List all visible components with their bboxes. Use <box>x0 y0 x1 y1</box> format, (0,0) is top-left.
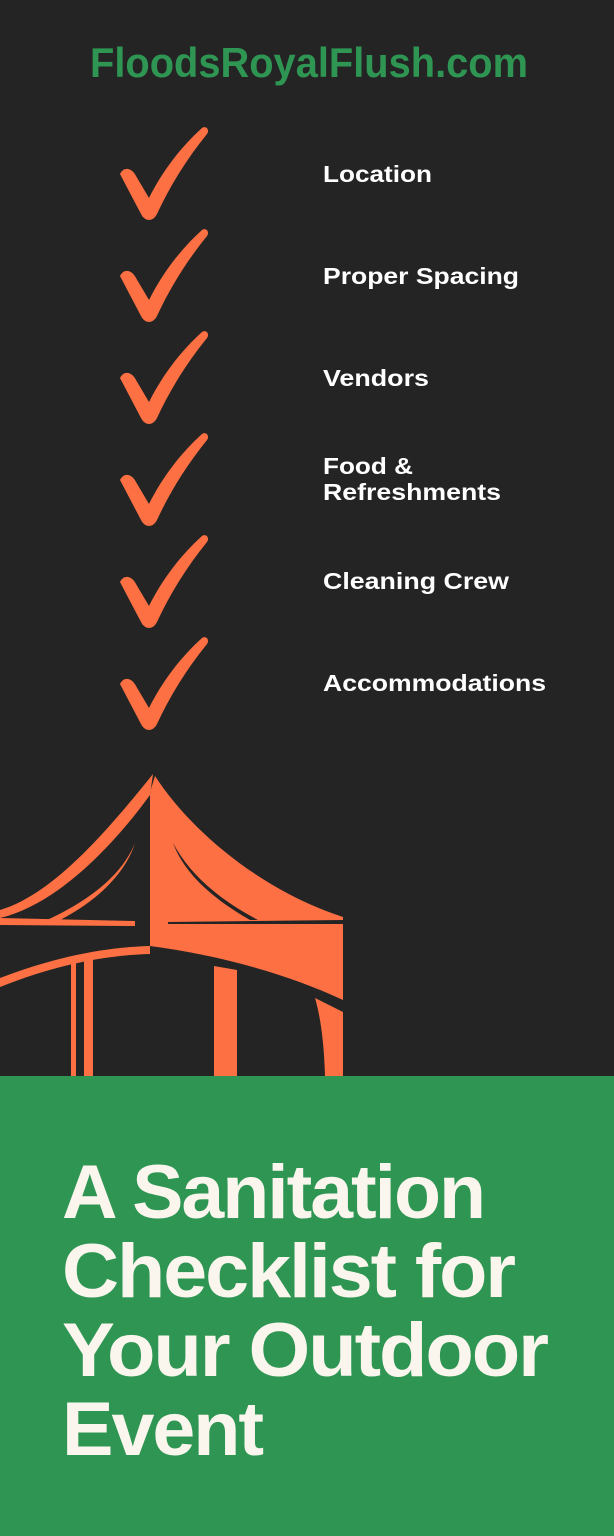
label: Vendors: Vendors <box>323 365 429 391</box>
label: Food & Refreshments: Refreshments <box>323 479 501 505</box>
icon: checkmark 2 <box>120 229 208 322</box>
header: website: FloodsRoyalFlush.com <box>90 39 528 86</box>
title text: A Sanitation <box>62 1150 484 1235</box>
label: Food & Refreshments: Food & <box>323 453 413 479</box>
icon: checkmark 1 <box>120 127 208 220</box>
label: Cleaning Crew: Cleaning Crew <box>323 568 509 594</box>
label: Accommodations: Accommodations <box>323 670 546 696</box>
checklist <box>120 127 546 730</box>
label: Proper Spacing: Proper Spacing <box>323 263 519 289</box>
icon: checkmark 6 <box>120 637 208 730</box>
icon: tent <box>0 774 343 1076</box>
title text: Your Outdoor <box>62 1308 548 1393</box>
icon: checkmark 3 <box>120 331 208 424</box>
icon: checkmark 5 <box>120 535 208 628</box>
panel: title <box>0 1076 614 1536</box>
icon: checkmark 4 <box>120 433 208 526</box>
title text: Event <box>62 1387 264 1472</box>
label: Location: Location <box>323 161 432 187</box>
title text: Checklist for <box>62 1229 515 1314</box>
